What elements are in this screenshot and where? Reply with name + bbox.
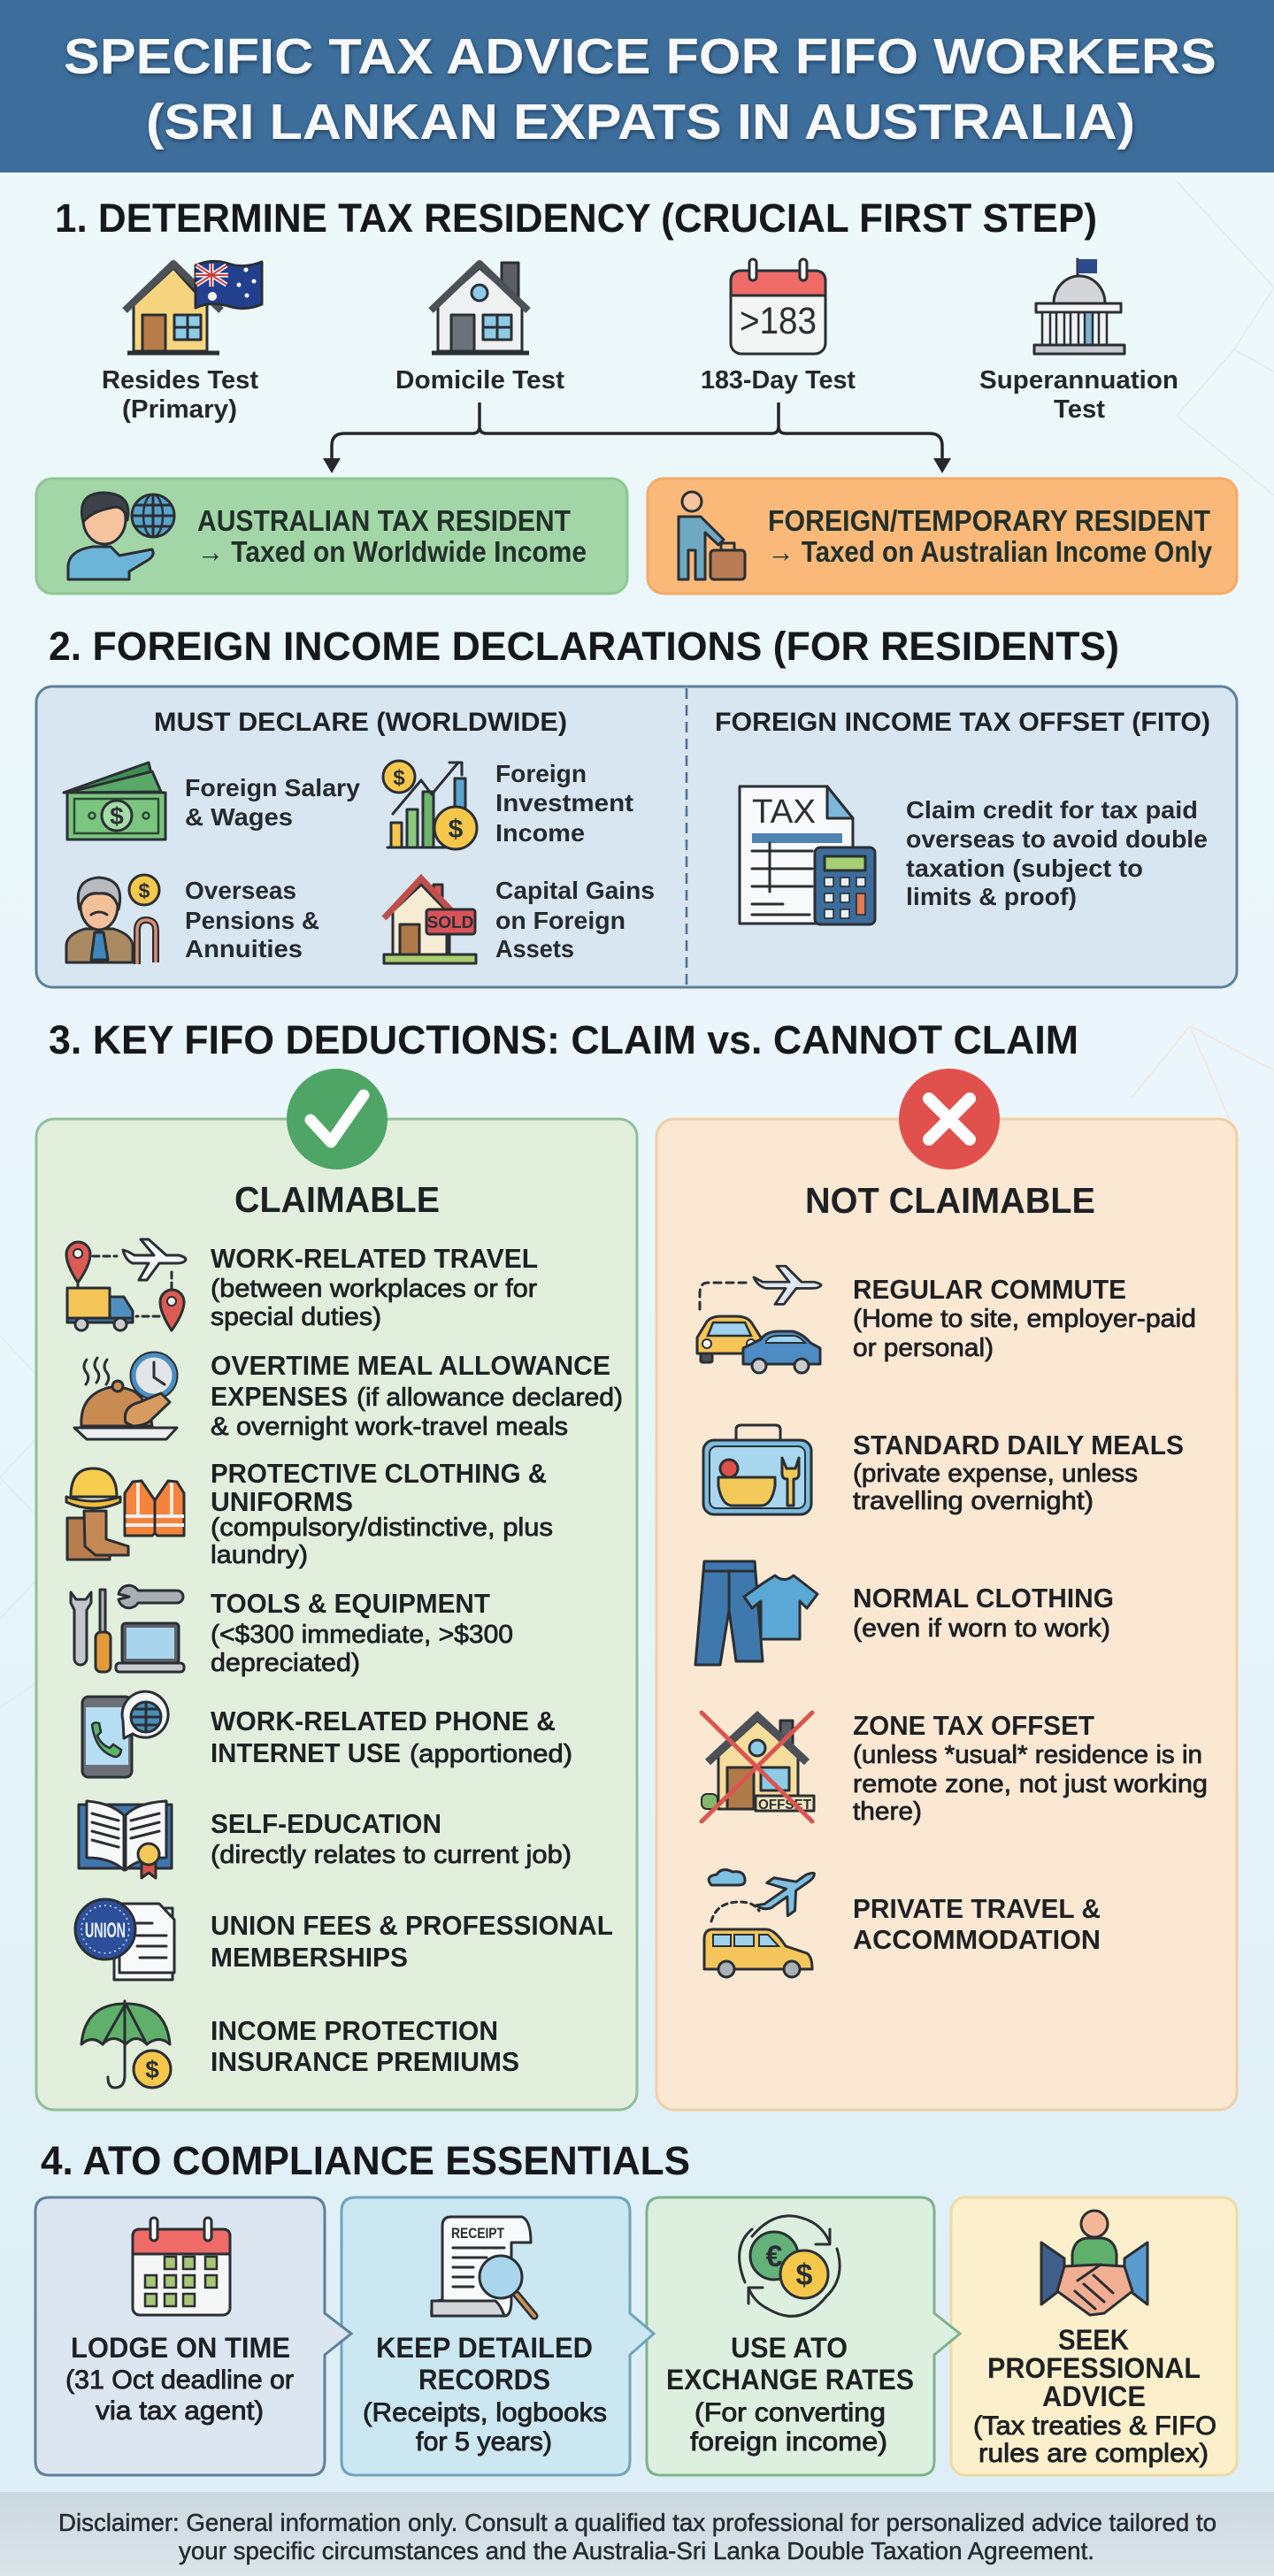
panel: lodge on time — [35, 2197, 351, 2475]
label: 183-day test: 183-Day Test — [701, 366, 856, 395]
icon: umbrella and coin: $ — [145, 2056, 159, 2083]
panel: not claimable — [656, 1069, 1237, 2110]
icon: sold house — [384, 878, 476, 963]
heading: section 2: 2. FOREIGN INCOME DECLARATIONS (FOR RESIDENTS) — [49, 624, 1119, 669]
text: tools: depreciated) — [211, 1649, 360, 1677]
text: overtime meal — [211, 1350, 623, 1441]
text: zone tax offset — [853, 1710, 1208, 1826]
label: resides test: Resides Test — [102, 366, 258, 395]
text: normal clothing — [853, 1583, 1114, 1643]
icon: investment chart: $ — [393, 766, 405, 790]
text: work-related travel: special duties) — [211, 1303, 381, 1331]
icon: calendar 183 days — [731, 259, 825, 354]
text: union fees: UNION FEES & PROFESSIONAL — [211, 1910, 613, 1941]
icon: jeans and t-shirt — [695, 1561, 817, 1665]
icon: meal and clock — [74, 1353, 177, 1439]
text: lodge on time: LODGE ON TIME — [71, 2332, 290, 2364]
icon: calendar — [133, 2218, 230, 2315]
panel: Australian tax resident — [36, 479, 627, 594]
text: zone tax offset: there) — [853, 1798, 922, 1826]
heading: section 4: 4. ATO COMPLIANCE ESSENTIALS — [41, 2138, 690, 2183]
icon: receipt and magnifier: RECEIPT — [451, 2225, 504, 2242]
icon: currency exchange: € — [766, 2240, 783, 2273]
text: protective clothing: PROTECTIVE CLOTHING & — [211, 1458, 547, 1489]
text: FITO explanation: Claim credit for tax paid — [906, 796, 1198, 824]
text: tools: TOOLS & EQUIPMENT — [211, 1588, 490, 1619]
icon: handshake — [1041, 2211, 1147, 2315]
text: work-related travel: (between workplaces or for — [211, 1275, 537, 1303]
icon: crossed-out house — [702, 1713, 814, 1821]
text: standard daily meals: travelling overnight) — [853, 1487, 1094, 1515]
text: foreign salary: Foreign Salary — [185, 774, 360, 801]
text: use ATO exchange rates: USE ATO — [731, 2332, 848, 2364]
text: standard daily meals — [853, 1430, 1184, 1515]
text: income protection — [211, 2015, 519, 2077]
text: standard daily meals: (private expense, unless — [853, 1460, 1138, 1488]
text: regular commute — [853, 1274, 1196, 1362]
icon: banknotes: $ — [110, 802, 124, 830]
text: protective clothing: UNIFORMS — [211, 1486, 353, 1517]
text: FITO explanation: limits & proof) — [906, 883, 1077, 910]
icon: red cross badge — [899, 1069, 1000, 1169]
text: overseas pensions: Annuities — [185, 935, 303, 962]
text: keep detailed records: (Receipts, logbooks — [363, 2398, 607, 2427]
heading: must declare: MUST DECLARE (WORLDWIDE) — [154, 708, 567, 737]
text: zone tax offset: ZONE TAX OFFSET — [853, 1710, 1094, 1741]
text: phone: WORK-RELATED PHONE & — [211, 1706, 556, 1736]
text: standard daily meals: STANDARD DAILY MEALS — [853, 1430, 1184, 1460]
text: tools — [211, 1588, 513, 1677]
text: FITO explanation: taxation (subject to — [906, 855, 1143, 882]
text: zone tax offset: remote zone, not just working — [853, 1770, 1208, 1798]
text: phone — [211, 1706, 572, 1768]
arrow: tests branch to outcomes — [323, 402, 951, 473]
text: self-education — [211, 1808, 572, 1869]
text: overtime meal: (if allowance declared) — [357, 1384, 623, 1412]
icon: currency exchange — [740, 2216, 840, 2316]
text: seek professional advice: (Tax treaties & FIFO — [973, 2411, 1216, 2441]
text: resident outcome: AUSTRALIAN TAX RESIDENT — [197, 504, 571, 537]
text: capital gains: on Foreign — [495, 907, 625, 934]
icon: house with Australian flag — [125, 261, 262, 353]
text: seek professional advice: ADVICE — [1042, 2380, 1146, 2412]
heading: claimable: CLAIMABLE — [234, 1179, 440, 1220]
text: work-related travel — [211, 1243, 538, 1331]
text: FITO explanation — [906, 796, 1208, 910]
icon: currency exchange: $ — [796, 2258, 813, 2292]
icon: commute plane and cars — [697, 1266, 821, 1373]
text: lodge on time — [65, 2332, 294, 2426]
text: private travel — [853, 1893, 1101, 1955]
text: capital gains — [495, 877, 655, 962]
text: disclaimer: your specific circumstances and the Australia-Sri Lanka Double Taxation Agreement. — [179, 2537, 1094, 2564]
icon: umbrella and coin — [81, 2001, 171, 2088]
title — [64, 28, 1216, 150]
text: resident outcome — [197, 504, 587, 568]
text: foreign salary — [185, 774, 360, 831]
text: union fees: MEMBERSHIPS — [211, 1942, 408, 1973]
text: protective clothing — [211, 1458, 553, 1569]
text: regular commute: REGULAR COMMUTE — [853, 1274, 1126, 1305]
text: normal clothing: NORMAL CLOTHING — [853, 1583, 1114, 1614]
text: overtime meal: OVERTIME MEAL ALLOWANCE — [211, 1350, 610, 1381]
text: foreign investment — [495, 760, 633, 847]
panel: seek professional advice — [951, 2197, 1237, 2475]
icon: pensioner: $ — [139, 879, 150, 902]
text: income protection: INCOME PROTECTION — [211, 2015, 498, 2046]
text: self-education: SELF-EDUCATION — [211, 1808, 441, 1839]
text: phone: (apportioned) — [410, 1740, 572, 1768]
text: zone tax offset: (unless *usual* residence is in — [853, 1741, 1202, 1769]
icon: pensioner — [66, 875, 159, 964]
panel: use ATO exchange rates — [647, 2197, 960, 2475]
text: overtime meal: EXPENSES — [211, 1381, 348, 1412]
panel: keep detailed records — [342, 2197, 654, 2475]
text: foreign salary: & Wages — [185, 803, 293, 831]
icon: investment chart — [383, 761, 477, 849]
text: tools: (<$300 immediate, >$300 — [211, 1621, 513, 1649]
icon: investment chart: $ — [449, 815, 464, 844]
text: seek professional advice: SEEK — [1058, 2324, 1129, 2356]
text: protective clothing: (compulsory/distinctive, plus — [211, 1514, 553, 1542]
text: overseas pensions: Pensions & — [185, 907, 319, 934]
text: phone: INTERNET USE — [211, 1737, 401, 1768]
footer: disclaimer — [0, 2492, 1274, 2576]
text: foreign outcome: FOREIGN/TEMPORARY RESIDENT — [768, 504, 1210, 537]
heading: section 3: 3. KEY FIFO DEDUCTIONS: CLAIM vs. CANNOT CLAIM — [49, 1017, 1078, 1062]
text: lodge on time: (31 Oct deadline or — [65, 2365, 294, 2395]
text: seek professional advice — [973, 2324, 1216, 2468]
text: overseas pensions — [185, 877, 319, 962]
icon: tools and laptop — [71, 1585, 184, 1672]
text: overtime meal: & overnight work-travel meals — [211, 1413, 568, 1441]
text: disclaimer — [58, 2509, 1216, 2564]
text: union fees — [211, 1910, 613, 1973]
icon: crossed-out house: OFFSET — [758, 1798, 811, 1813]
label: domicile test: Domicile Test — [395, 366, 564, 395]
text: seek professional advice: PROFESSIONAL — [987, 2352, 1201, 2384]
icon: calendar 183 days: >183 — [740, 300, 817, 342]
text: self-education: (directly relates to current job) — [211, 1841, 572, 1869]
icon: traveller with suitcase — [679, 492, 745, 579]
panel: foreign/temporary resident — [648, 479, 1237, 594]
icon: parliament building — [1034, 259, 1124, 354]
icon: hard hat, boots and vest — [66, 1468, 184, 1560]
heading: not claimable: NOT CLAIMABLE — [805, 1180, 1095, 1221]
text: use ATO exchange rates: EXCHANGE RATES — [666, 2364, 914, 2396]
icon: tax form and calculator — [740, 786, 875, 924]
text: capital gains: Capital Gains — [495, 877, 655, 904]
text: foreign outcome: → Taxed on Australian Income Only — [768, 535, 1213, 568]
label: resides test — [102, 366, 258, 424]
heading: section 1: 1. DETERMINE TAX RESIDENCY (CRUCIAL FIRST STEP) — [55, 196, 1097, 241]
text: foreign investment: Investment — [495, 789, 633, 816]
text: income protection: INSURANCE PREMIUMS — [211, 2046, 519, 2077]
icon: travel route — [66, 1239, 186, 1330]
label: resides test: (Primary) — [122, 395, 237, 424]
label: superannuation test — [979, 366, 1178, 424]
header banner — [0, 0, 1274, 172]
text: protective clothing: laundry) — [211, 1541, 308, 1569]
icon: sold house: SOLD — [427, 914, 473, 932]
text: keep detailed records — [363, 2332, 607, 2457]
icon: person with globe — [68, 493, 174, 579]
text: seek professional advice: rules are complex) — [979, 2439, 1209, 2468]
text: use ATO exchange rates — [666, 2332, 914, 2457]
text: regular commute: or personal) — [853, 1334, 994, 1362]
text: private travel: PRIVATE TRAVEL & — [853, 1893, 1101, 1924]
icon: green check badge — [287, 1069, 388, 1169]
panel: foreign income — [36, 686, 1237, 987]
text: lodge on time: via tax agent) — [96, 2396, 264, 2426]
text: FITO explanation: overseas to avoid double — [906, 825, 1208, 853]
icon: receipt and magnifier — [432, 2217, 534, 2316]
text: work-related travel: WORK-RELATED TRAVEL — [211, 1243, 538, 1274]
icon: phone and internet — [82, 1691, 168, 1777]
text: regular commute: (Home to site, employer-paid — [853, 1305, 1196, 1333]
text: capital gains: Assets — [495, 935, 574, 962]
icon: banknotes — [64, 763, 165, 840]
text: keep detailed records: for 5 years) — [416, 2427, 552, 2457]
text: foreign investment: Foreign — [495, 760, 587, 787]
text: use ATO exchange rates: (For converting — [695, 2398, 886, 2427]
title: SPECIFIC TAX ADVICE FOR FIFO WORKERS — [64, 28, 1216, 85]
icon: lunch box — [703, 1425, 811, 1514]
text: foreign investment: Income — [495, 819, 585, 847]
text: private travel: ACCOMMODATION — [853, 1924, 1101, 1955]
text: normal clothing: (even if worn to work) — [853, 1614, 1110, 1643]
icon: book and ribbon — [79, 1801, 172, 1878]
text: use ATO exchange rates: foreign income) — [690, 2427, 887, 2457]
icon: cloud, plane and van — [704, 1858, 825, 1977]
panel: claimable — [36, 1069, 637, 2110]
icon: union seal and document: UNION — [85, 1919, 126, 1943]
text: foreign outcome — [768, 504, 1213, 568]
label: superannuation test: Superannuation — [979, 366, 1178, 395]
text: keep detailed records: KEEP DETAILED — [376, 2332, 593, 2364]
icon: union seal and document — [75, 1899, 174, 1980]
title: (SRI LANKAN EXPATS IN AUSTRALIA) — [146, 94, 1135, 150]
icon: house — [431, 263, 529, 353]
text: keep detailed records: RECORDS — [418, 2364, 550, 2396]
text: overseas pensions: Overseas — [185, 877, 296, 904]
text: resident outcome: → Taxed on Worldwide Income — [197, 535, 587, 568]
heading: FITO: FOREIGN INCOME TAX OFFSET (FITO) — [715, 708, 1210, 737]
icon: tax form and calculator: TAX — [752, 794, 816, 831]
label: superannuation test: Test — [1054, 395, 1105, 424]
text: disclaimer: Disclaimer: General information only. Consult a qualified tax professional for personalized advice tailored to — [58, 2509, 1216, 2536]
